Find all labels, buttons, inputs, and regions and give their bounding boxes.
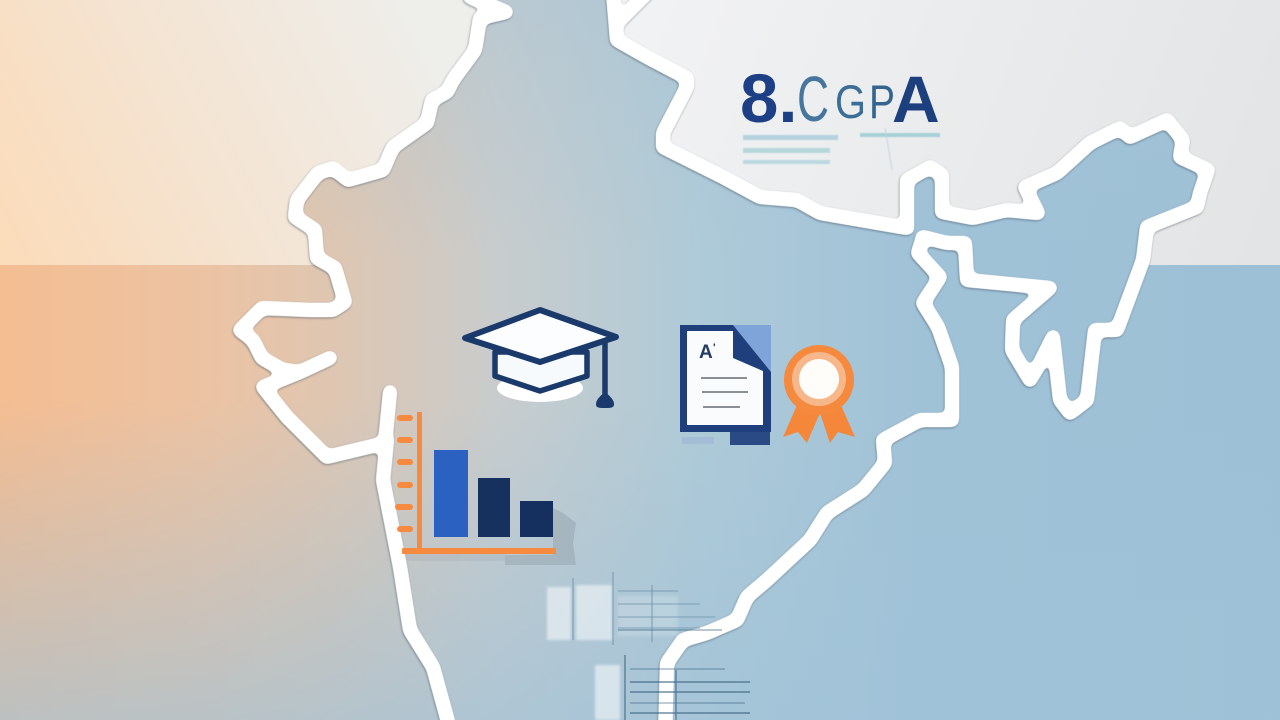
- CGPA heading: C: [797, 63, 829, 135]
- India map white outline: [240, 0, 1208, 720]
- icon: graded document: [680, 325, 771, 445]
- CGPA heading: P: [869, 75, 895, 128]
- icon: graduation cap: [465, 310, 616, 408]
- CGPA heading: G: [835, 75, 866, 128]
- map interior fill: [303, 0, 1198, 265]
- CGPA heading: A: [892, 62, 940, 136]
- icon: graded document: A: [699, 342, 713, 363]
- icon: orange award ribbon: [783, 345, 855, 443]
- faded data table, upper: [547, 572, 722, 645]
- bar chart: [395, 412, 576, 565]
- faded data table, lower: [595, 655, 750, 720]
- CGPA heading: [740, 60, 940, 137]
- heading underline bars: [743, 128, 940, 170]
- icon: graded document: ': [713, 342, 716, 354]
- CGPA heading: 8.: [740, 60, 798, 137]
